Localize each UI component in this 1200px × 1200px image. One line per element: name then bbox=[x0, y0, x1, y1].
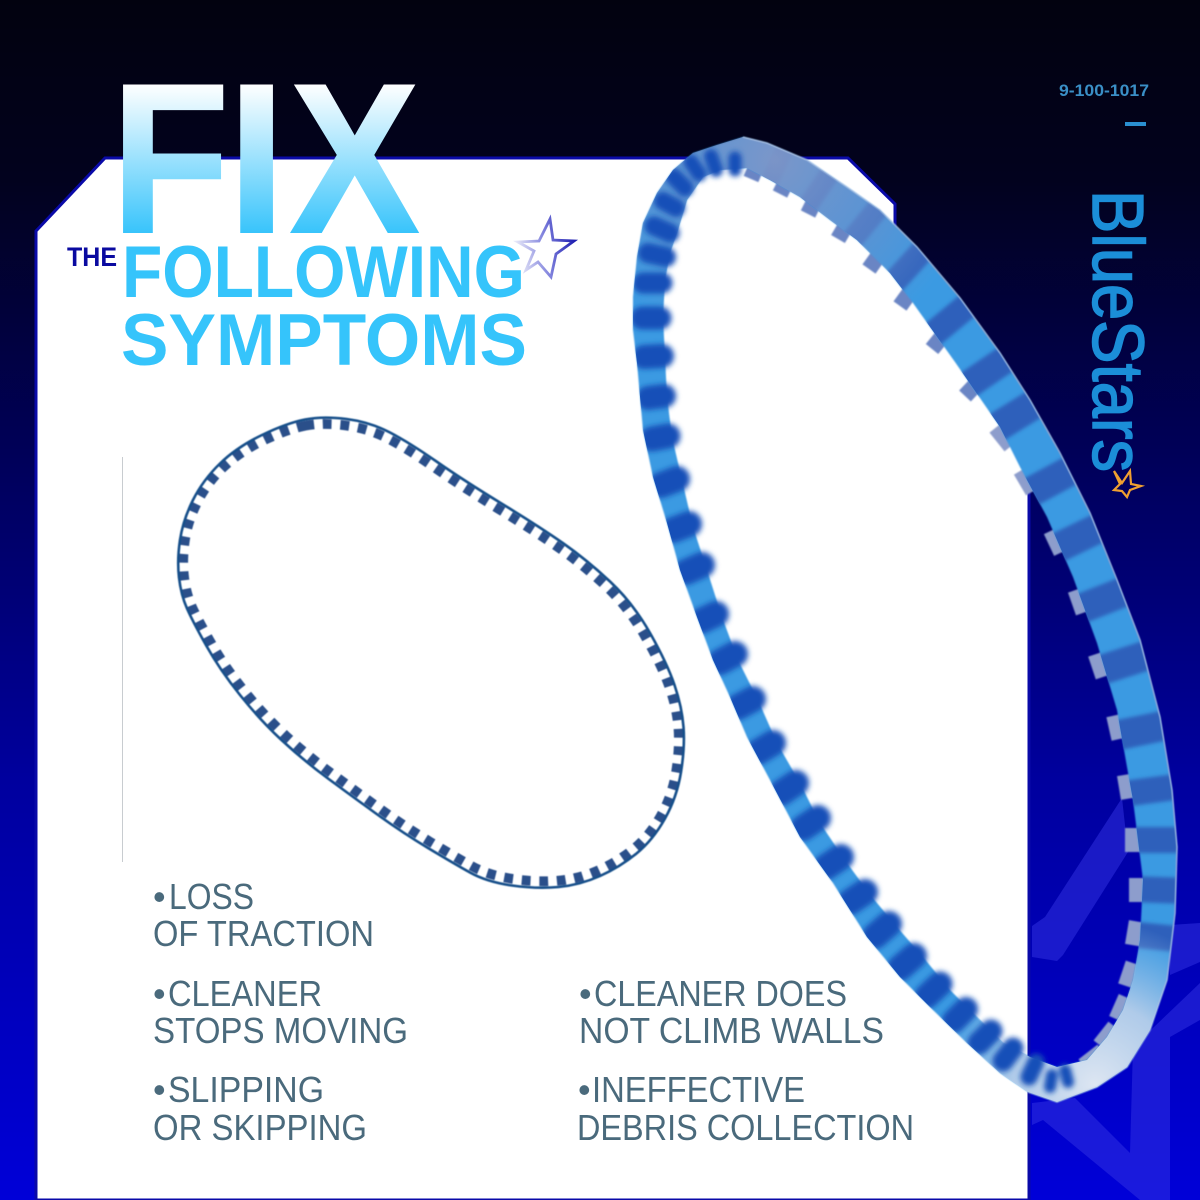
large belt left dark teeth bbox=[642, 156, 1068, 1087]
icon: brand star bbox=[1114, 471, 1141, 497]
large belt right stripes and shading bbox=[620, 120, 1190, 1120]
title: THE: THE bbox=[67, 242, 117, 272]
symptom: loss of traction bbox=[153, 876, 374, 954]
symptom: loss of traction: LOSS bbox=[169, 876, 254, 917]
symptom: cleaner stops moving: STOPS MOVING bbox=[153, 1010, 408, 1051]
symptom: slipping or skipping: OR SKIPPING bbox=[153, 1107, 367, 1148]
title: FOLLOWING: FOLLOWING bbox=[122, 232, 525, 313]
symptom: cleaner does not climb walls: NOT CLIMB WALLS bbox=[579, 1010, 884, 1051]
symptom: slipping or skipping bbox=[153, 1069, 367, 1148]
small belt band bbox=[178, 418, 684, 888]
dash mark bbox=[1125, 122, 1146, 126]
large belt bbox=[620, 120, 1190, 1120]
symptom: ineffective debris collection: • bbox=[578, 1069, 591, 1110]
symptom: ineffective debris collection: DEBRIS COLLECTION bbox=[577, 1107, 914, 1148]
title: FIX: X bbox=[290, 41, 419, 278]
title: FIX bbox=[111, 40, 419, 278]
icon: title star bbox=[518, 219, 574, 277]
symptom: ineffective debris collection bbox=[577, 1069, 914, 1148]
symptom: slipping or skipping: SLIPPING bbox=[168, 1069, 324, 1110]
panel: white card bbox=[36, 158, 1029, 1200]
large belt outer highlight bbox=[743, 137, 1177, 1102]
thin vertical divider bbox=[122, 457, 123, 862]
part number: 9-100-1017 bbox=[1059, 81, 1149, 100]
symptom: cleaner does not climb walls bbox=[579, 973, 884, 1051]
symptom: loss of traction: • bbox=[153, 876, 166, 917]
title: FIX: I bbox=[227, 40, 286, 278]
small belt bbox=[178, 418, 684, 888]
symptom: cleaner does not climb walls: CLEANER DOES bbox=[594, 973, 847, 1014]
title: FIX: F bbox=[111, 41, 229, 278]
watermark star bbox=[1032, 798, 1200, 1200]
symptom: cleaner stops moving: • bbox=[153, 973, 166, 1014]
large belt pale teeth bbox=[751, 165, 1147, 1065]
symptom: ineffective debris collection: INEFFECTIVE bbox=[592, 1069, 805, 1110]
large belt band bbox=[633, 137, 1177, 1102]
symptom: slipping or skipping: • bbox=[153, 1069, 166, 1110]
symptom: loss of traction: OF TRACTION bbox=[153, 913, 374, 954]
title: SYMPTOMS: SYMPTOMS bbox=[121, 300, 527, 381]
symptom list bbox=[153, 876, 914, 1148]
symptom: cleaner does not climb walls: • bbox=[579, 973, 592, 1014]
small belt teeth bbox=[182, 423, 680, 883]
brand name: BlueStars: BlueStars bbox=[1077, 190, 1157, 472]
symptom: cleaner stops moving: CLEANER bbox=[168, 973, 322, 1014]
symptom: cleaner stops moving bbox=[153, 973, 408, 1051]
